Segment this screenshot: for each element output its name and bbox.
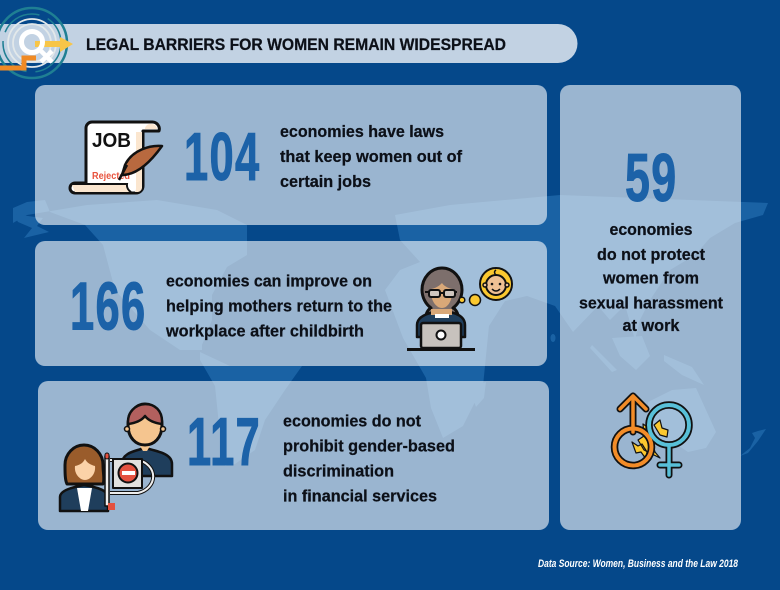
text: 59 description: women from: [602, 270, 699, 288]
text: 117 description: economies do not: [283, 412, 421, 430]
text: 117 description: prohibit gender-based: [283, 438, 455, 456]
text: 166 description: economies can improve on: [166, 272, 372, 290]
text: 117 description: [283, 412, 455, 506]
text: 117 description: discrimination: [283, 462, 394, 480]
scroll text: JOB: [92, 130, 131, 152]
text: 166 description: workplace after childbirth: [165, 322, 364, 340]
icon: broken gender symbols: [614, 396, 689, 475]
stat: 166: 166: [70, 269, 146, 345]
icon: rejected job scroll: [70, 122, 162, 193]
world map background: [13, 195, 768, 466]
text: 104 description: economies have laws: [280, 123, 444, 141]
stat: 117: 117: [187, 404, 261, 480]
icon: rejected job scroll: Rejected: [92, 170, 130, 182]
panel: 117 economies: [38, 381, 549, 530]
text: 104 description: certain jobs: [280, 173, 371, 191]
text: 104 description: [280, 123, 462, 191]
text: 117 description: in financial services: [283, 488, 437, 506]
text: 59 description: sexual harassment: [579, 294, 723, 312]
icon: mother at laptop with baby thought: [407, 268, 512, 350]
header title: LEGAL BARRIERS FOR WOMEN REMAIN WIDESPREAD: [86, 36, 506, 54]
text: 166 description: [165, 272, 392, 340]
header bar: [0, 24, 577, 63]
icon: man, woman and barrier: [60, 404, 172, 511]
panel: 59 economies: [560, 85, 741, 530]
panel: 166 economies: [35, 241, 547, 366]
text: 59 description: [579, 221, 723, 335]
logo icon: [0, 8, 73, 78]
text: 59 description: economies: [610, 221, 692, 239]
stat: 104: 104: [184, 119, 260, 195]
text: 104 description: that keep women out of: [280, 148, 462, 166]
text: 166 description: helping mothers return to the: [166, 298, 392, 316]
panel: 104 economies: [35, 85, 547, 225]
stat: 59: 59: [625, 141, 678, 216]
text: 59 description: at work: [622, 317, 680, 335]
text: 59 description: do not protect: [597, 246, 705, 264]
